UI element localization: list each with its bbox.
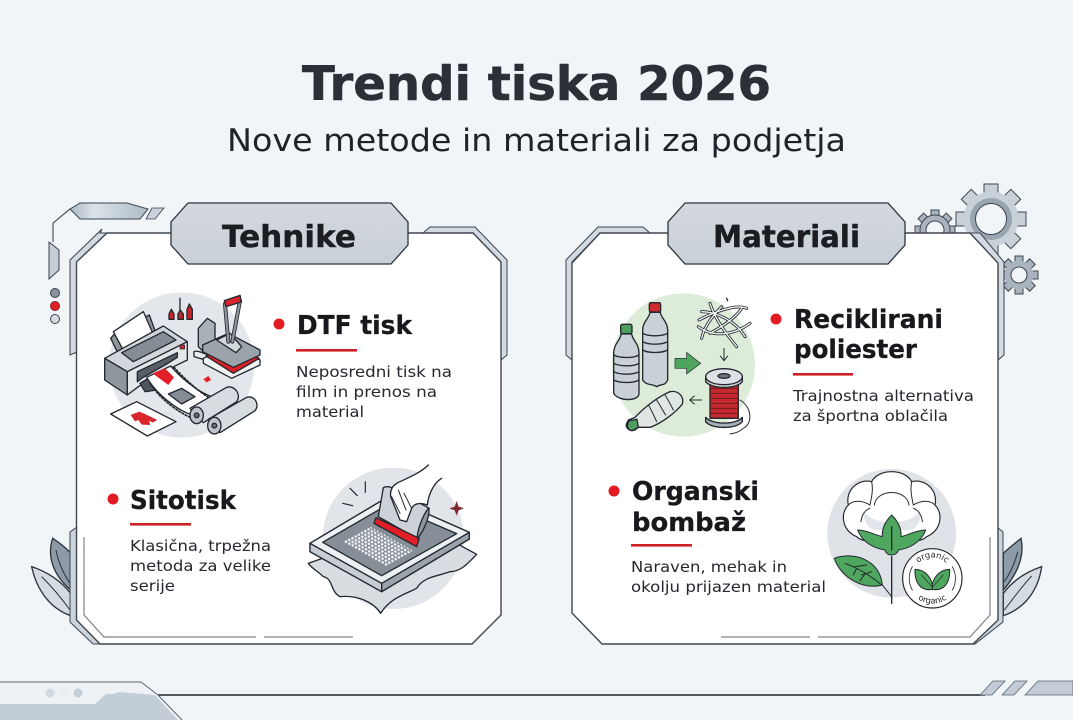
bullet xyxy=(274,318,284,330)
description: Organski bombaž: Naraven, mehak in xyxy=(631,558,787,576)
description: Organski bombaž: okolju prijazen material xyxy=(631,578,826,596)
left corner decoration xyxy=(49,203,164,324)
heading: DTF tisk: DTF tisk xyxy=(297,311,413,341)
badge bottom label: organic xyxy=(918,596,946,605)
left decorative leaves xyxy=(32,538,71,616)
icon: large gear xyxy=(956,184,1026,254)
bottom line xyxy=(158,694,985,696)
panel frame strips xyxy=(70,229,155,355)
illustration: recycled polyester xyxy=(612,293,755,437)
illustration: DTF printer xyxy=(105,292,260,438)
panel body xyxy=(76,233,501,644)
heading: Organski bombaž: Organski xyxy=(632,477,759,507)
icon: small gear behind panel xyxy=(915,210,955,250)
bullet xyxy=(608,486,620,496)
heading tab: Tehnike xyxy=(171,203,408,264)
heading: Sitotisk: Sitotisk xyxy=(130,486,237,516)
bullet xyxy=(770,314,782,324)
panel: Materiali xyxy=(566,202,1004,645)
badge top label: organic xyxy=(916,552,949,562)
heading tab: Tehnike: Tehnike xyxy=(222,220,356,255)
panel body xyxy=(572,233,998,644)
right decorative leaves xyxy=(1003,538,1042,616)
panel: Tehnike xyxy=(70,203,507,644)
red rule xyxy=(296,349,357,352)
illustration: screen printing xyxy=(308,465,477,613)
red rule xyxy=(631,544,692,547)
bullet xyxy=(108,494,118,504)
panel frame strips xyxy=(566,227,650,360)
icon: gears xyxy=(915,184,1038,294)
description: Reciklirani poliester: Trajnostna alternativa xyxy=(792,387,974,405)
subtitle: Nove metode in materiali za podjetja xyxy=(227,123,846,159)
mesh xyxy=(345,528,412,565)
description: Sitotisk: serije xyxy=(130,577,175,595)
red rule xyxy=(793,373,853,376)
heading tab: Materiali: Materiali xyxy=(713,220,860,255)
description: DTF tisk: material xyxy=(296,403,364,421)
description: Sitotisk: Klasična, trpežna xyxy=(130,537,271,555)
bottom left decoration xyxy=(0,681,182,720)
illustration: organic cotton xyxy=(827,469,963,609)
heading tab: Materiali xyxy=(668,203,905,264)
description: Reciklirani poliester: za športna oblačila xyxy=(793,407,948,425)
bottom right stripes xyxy=(980,681,1073,695)
icon: medium gear xyxy=(1000,256,1038,294)
red rule xyxy=(130,523,191,526)
title: Trendi tiska 2026 xyxy=(302,57,771,112)
heading: Reciklirani poliester: Reciklirani xyxy=(794,305,943,335)
description: Sitotisk: metoda za velike xyxy=(130,557,271,575)
heading: Reciklirani poliester: poliester xyxy=(794,335,917,365)
description: DTF tisk: Neposredni tisk na xyxy=(296,363,452,381)
heading: Organski bombaž: bombaž xyxy=(632,508,746,538)
description: DTF tisk: film in prenos na xyxy=(296,383,437,401)
